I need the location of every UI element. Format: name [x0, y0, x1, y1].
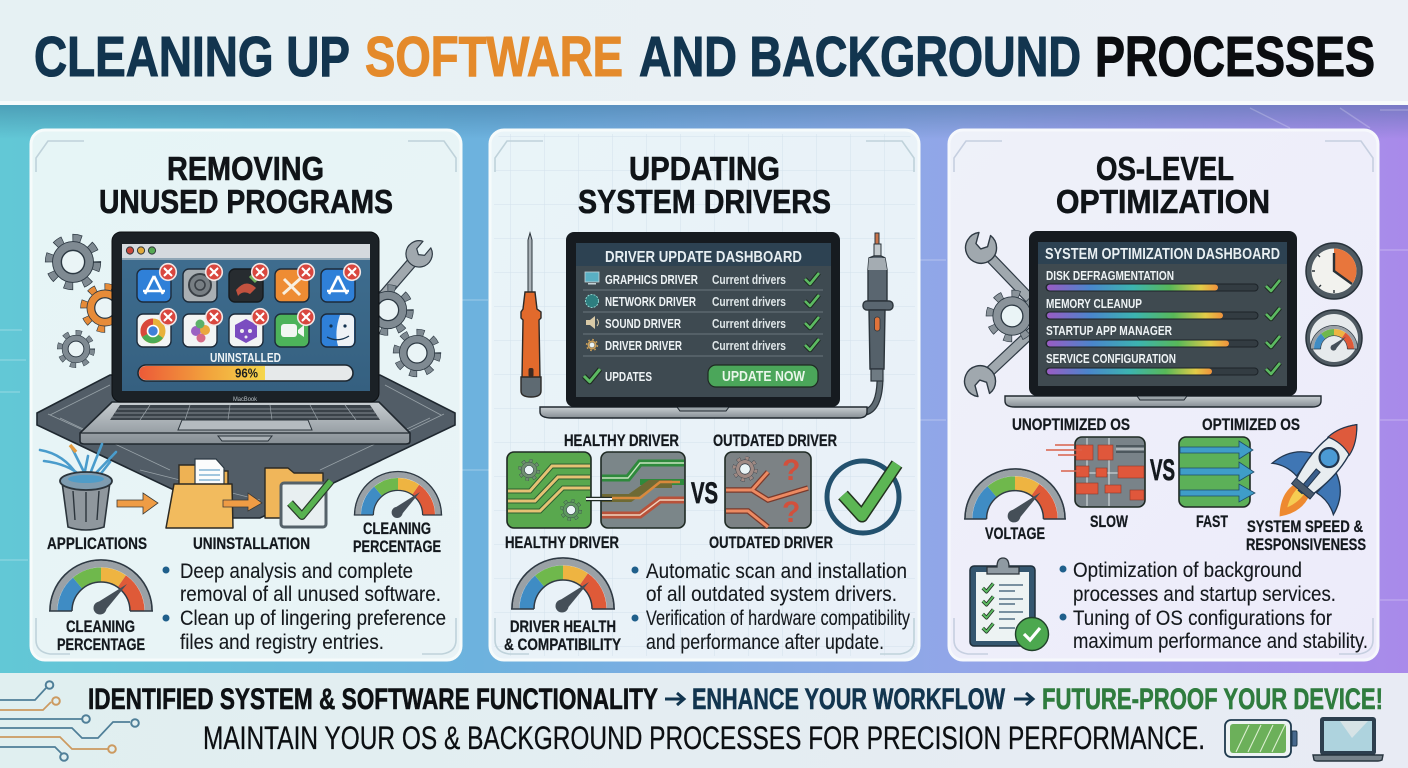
icon: speed dial	[1306, 310, 1362, 366]
driver rows: Current drivers	[712, 316, 786, 331]
gauge: driver health	[504, 558, 621, 654]
gauge: driver health: DRIVER HEALTH	[510, 618, 616, 636]
panel: removing unused programs	[31, 130, 461, 660]
speed labels: SLOW	[1090, 513, 1128, 531]
heading	[1056, 150, 1270, 220]
icon: trash can with splash	[40, 444, 116, 530]
label: applications: APPLICATIONS	[47, 535, 147, 553]
gauge: voltage: VOLTAGE	[985, 525, 1045, 543]
comparison labels	[1012, 416, 1300, 434]
comparison labels bottom: OUTDATED DRIVER	[709, 534, 833, 552]
icon: screwdriver	[521, 233, 541, 397]
gauge: top right cleaning percentage: PERCENTAGE	[353, 538, 441, 556]
header band	[0, 0, 1408, 105]
heading: UNUSED PROGRAMS	[99, 183, 393, 220]
icon: folder with check	[265, 468, 331, 527]
comparison labels: UNOPTIMIZED OS	[1012, 416, 1130, 434]
icon: laptop optimization dashboard	[1005, 231, 1321, 407]
vs label: VS	[691, 477, 718, 510]
card: healthy circuit	[507, 452, 591, 528]
arrow: folder to check	[223, 493, 262, 511]
gauge: lower cleaning percentage: PERCENTAGE	[57, 636, 145, 654]
gauge: lower cleaning percentage	[49, 560, 153, 654]
gauge: driver health: & COMPATIBILITY	[504, 636, 621, 654]
icon: big check circle	[827, 461, 899, 533]
driver rows: NETWORK DRIVER	[605, 294, 696, 309]
optimization rows: SERVICE CONFIGURATION	[1046, 351, 1176, 366]
heading: SYSTEM DRIVERS	[578, 183, 831, 220]
gauge: top right cleaning percentage	[353, 472, 442, 556]
icon: laptop driver dashboard	[540, 232, 867, 418]
callout line 1: ENHANCE YOUR WORKFLOW	[692, 683, 1005, 716]
bullet list: Optimization of background	[1073, 558, 1302, 582]
icon: battery	[1225, 720, 1297, 757]
updates status and button: UPDATE NOW	[722, 368, 806, 385]
bullet list: Clean up of lingering preference	[180, 606, 446, 630]
label: uninstallation: UNINSTALLATION	[193, 535, 310, 553]
label: system speed	[1246, 518, 1366, 554]
optimization rows: DISK DEFRAGMENTATION	[1046, 268, 1174, 283]
title	[34, 25, 1375, 89]
icon: laptop optimization dashboard: SYSTEM OPTIMIZATION DASHBOARD	[1045, 246, 1280, 263]
bullet list: files and registry entries.	[180, 630, 384, 654]
progress bar: 96%	[235, 366, 258, 380]
top shadow under header	[0, 105, 1408, 139]
bullet list: processes and startup services.	[1073, 582, 1336, 606]
label: system speed: RESPONSIVENESS	[1246, 536, 1366, 554]
driver rows	[585, 272, 819, 353]
comparison labels bottom	[505, 534, 833, 552]
bullet list	[1060, 558, 1368, 653]
driver rows: SOUND DRIVER	[605, 316, 681, 331]
background circuit decoration	[0, 108, 1408, 600]
driver rows: GRAPHICS DRIVER	[605, 272, 698, 287]
title: AND BACKGROUND	[639, 25, 1081, 89]
icon: laptop with uninstall screen: MacBook	[233, 397, 258, 403]
speed labels: FAST	[1196, 513, 1228, 531]
driver rows: Current drivers	[712, 294, 786, 309]
driver rows: Current drivers	[712, 338, 786, 353]
label: system speed: SYSTEM SPEED &	[1247, 518, 1363, 536]
heading: OS-LEVEL	[1096, 150, 1234, 187]
bullet list	[162, 559, 446, 654]
icon: crossed wrenches and gear	[961, 230, 1034, 399]
icon: application tiles	[137, 264, 360, 347]
icon: laptop with uninstall screen	[80, 232, 410, 444]
bullet list: Verification of hardware compatibility	[646, 606, 910, 630]
card: outdated circuit	[725, 452, 811, 529]
panel: os-level optimization	[949, 130, 1387, 660]
bullet list: Automatic scan and installation	[646, 559, 907, 583]
card: outdated circuit: ?	[782, 454, 800, 487]
footer band	[0, 673, 1408, 768]
icon: clipboard checklist	[970, 558, 1048, 650]
bullet list	[632, 559, 910, 654]
heading: UPDATING	[629, 150, 780, 187]
arrow: applications to uninstallation	[117, 493, 158, 514]
vs label: VS	[1150, 454, 1175, 487]
title: SOFTWARE	[365, 25, 623, 89]
comparison labels: OPTIMIZED OS	[1202, 416, 1300, 434]
bullet list: and performance after update.	[646, 630, 884, 654]
bullet list: Deep analysis and complete	[180, 559, 413, 583]
optimization rows: MEMORY CLEANUP	[1046, 296, 1142, 311]
bullet list: of all outdated system drivers.	[646, 582, 897, 606]
driver rows: DRIVER DRIVER	[605, 338, 682, 353]
comparison labels top	[564, 432, 837, 450]
icon: small laptop	[1313, 717, 1383, 761]
heading	[578, 150, 831, 220]
heading: OPTIMIZATION	[1056, 183, 1270, 220]
card: outdated circuit: ?	[782, 496, 800, 529]
icon: rocket	[1249, 399, 1387, 542]
driver rows: Current drivers	[712, 272, 786, 287]
updates status and button: UPDATES	[605, 369, 652, 384]
updates status and button	[584, 365, 818, 387]
gauge: voltage	[964, 469, 1066, 543]
gauge: lower cleaning percentage: CLEANING	[66, 618, 135, 636]
optimization rows	[1046, 268, 1280, 375]
heading: REMOVING	[167, 150, 324, 187]
callout line 1	[88, 683, 1383, 716]
icon: circuit traces	[0, 681, 139, 761]
card: fast flow arrows	[1179, 437, 1255, 507]
icon: gears and wrench	[50, 236, 437, 373]
bullet list: Tuning of OS configurations for	[1073, 606, 1332, 630]
bullet list: maximum performance and stability.	[1073, 629, 1368, 653]
icon: test probe	[863, 233, 893, 412]
panel: updating system drivers	[490, 130, 919, 660]
icon: folder with documents	[166, 459, 233, 528]
speed labels	[1090, 513, 1228, 531]
title: CLEANING UP	[34, 25, 350, 89]
icon: laptop driver dashboard: DRIVER UPDATE DASHBOARD	[605, 249, 802, 266]
card: transition circuit	[586, 452, 685, 528]
icon: clock	[1306, 243, 1362, 299]
comparison labels top: OUTDATED DRIVER	[713, 432, 837, 450]
callout line 1: IDENTIFIED SYSTEM & SOFTWARE FUNCTIONALITY	[88, 683, 658, 716]
comparison labels bottom: HEALTHY DRIVER	[505, 534, 619, 552]
progress bar: UNINSTALLED	[210, 350, 281, 365]
comparison labels top: HEALTHY DRIVER	[564, 432, 679, 450]
icon: dark laptop mat	[37, 375, 455, 518]
progress bar	[138, 350, 353, 381]
bullet list: removal of all unused software.	[180, 582, 441, 606]
optimization rows: STARTUP APP MANAGER	[1046, 323, 1172, 338]
heading	[99, 150, 393, 220]
gauge: top right cleaning percentage: CLEANING	[363, 520, 431, 538]
card: slow fragmented blocks	[1046, 437, 1145, 507]
